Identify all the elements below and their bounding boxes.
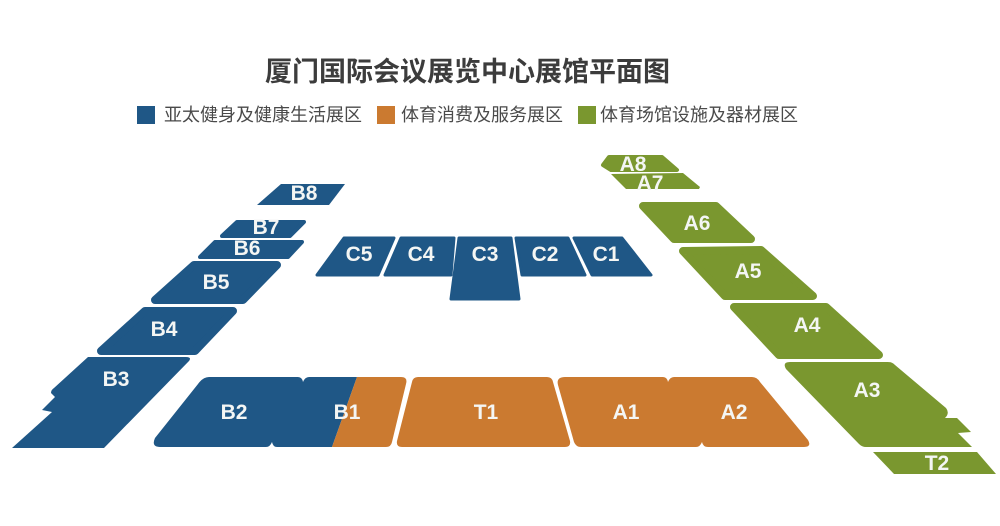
halls A1 and A2: A2	[721, 401, 747, 424]
hall B8	[257, 182, 345, 205]
hall B3: B3	[103, 368, 129, 391]
hall C2: C2	[532, 243, 558, 266]
hall A6	[643, 206, 751, 239]
hall T1: T1	[474, 401, 499, 424]
hall C3: C3	[472, 243, 498, 266]
halls C1 to C5	[317, 238, 651, 299]
hall A5	[683, 250, 813, 296]
hall C1	[574, 238, 651, 275]
hall B1 (orange section)	[332, 377, 406, 447]
hall C1: C1	[593, 243, 620, 266]
hall B1 (orange section): B1	[334, 401, 361, 424]
hall A7	[611, 172, 700, 195]
hall A4	[734, 307, 879, 355]
hall B4: B4	[151, 318, 178, 341]
hall A6: A6	[684, 212, 710, 235]
legend item: Asia-Pacific fitness and healthy living zone: 亚太健身及健康生活展区	[164, 105, 362, 125]
hall B7	[222, 216, 304, 239]
hall T1	[397, 377, 570, 447]
hall C4: C4	[408, 243, 435, 266]
legend item: sports consumption and services zone: 体育消费及服务展区	[401, 105, 563, 125]
hall B6	[200, 237, 302, 260]
hall A8	[603, 153, 677, 176]
hall A5: A5	[735, 260, 762, 283]
hall C4	[385, 238, 454, 275]
hall A8: A8	[620, 153, 647, 176]
hall B6: B6	[234, 237, 260, 260]
hall A7: A7	[637, 172, 663, 195]
hall B5: B5	[203, 271, 230, 294]
hall A3	[785, 362, 972, 447]
hall A3: A3	[854, 379, 880, 402]
halls B2 and B1 (blue section)	[154, 377, 357, 447]
hall B7: B7	[253, 216, 279, 239]
hall B5	[155, 265, 277, 300]
hall C5	[317, 238, 394, 275]
halls B2 and B1 (blue section): B2	[221, 401, 247, 424]
hall A4: A4	[794, 314, 821, 337]
hall T2	[873, 452, 996, 475]
title: 厦门国际会议展览中心展馆平面图	[265, 57, 670, 87]
hall C5: C5	[346, 243, 373, 266]
halls A1 and A2	[558, 377, 809, 447]
legend	[137, 105, 798, 125]
hall B4	[101, 311, 233, 351]
hall C2	[516, 238, 585, 275]
hall T2: T2	[925, 452, 949, 475]
hall C3	[451, 238, 519, 299]
halls A1 and A2: A1	[613, 401, 640, 424]
legend item: sports venue facilities and equipment zone: 体育场馆设施及器材展区	[600, 105, 798, 125]
hall B3	[12, 357, 190, 448]
hall B8: B8	[291, 182, 318, 205]
